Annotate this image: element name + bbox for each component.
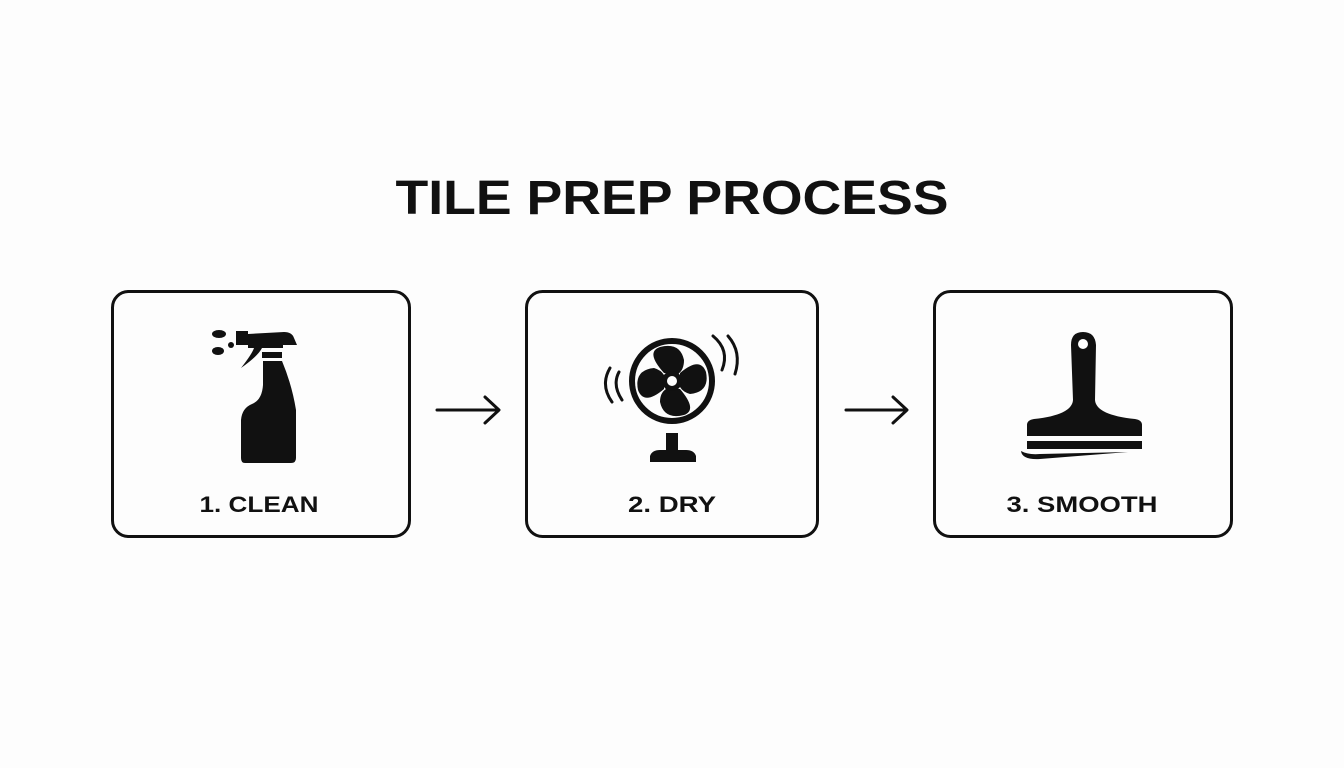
icon: spray bottle <box>212 330 297 463</box>
icon: fan <box>605 336 737 462</box>
title: TILE PREP PROCESS <box>396 172 948 225</box>
label: smooth: 3. SMOOTH <box>1006 492 1158 517</box>
arrow 2 <box>846 397 907 423</box>
panel: smooth <box>934 292 1232 536</box>
panel: dry <box>526 292 818 536</box>
icon: squeegee <box>1021 332 1142 459</box>
label: clean: 1. CLEAN <box>200 492 318 517</box>
panel: clean <box>112 292 410 536</box>
label: dry: 2. DRY <box>628 492 716 517</box>
arrow 1 <box>437 397 499 423</box>
